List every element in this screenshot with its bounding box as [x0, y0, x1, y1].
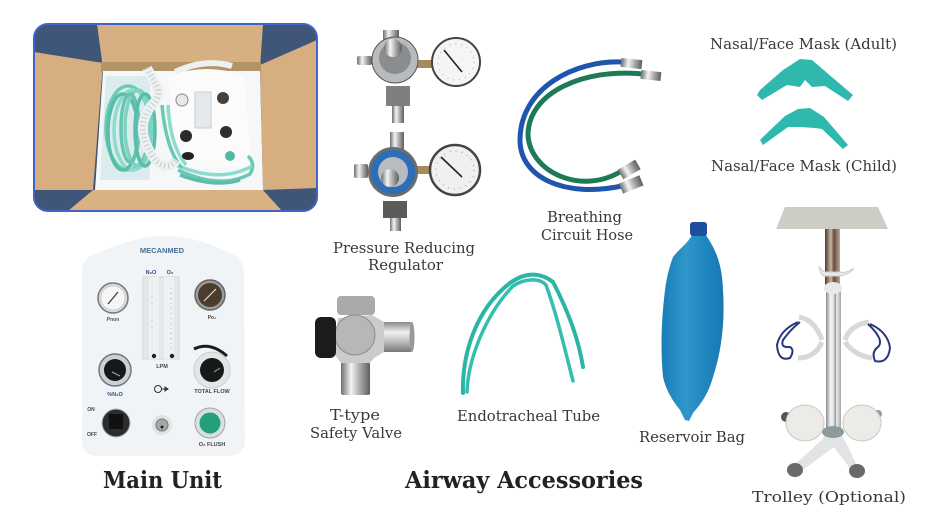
icon: child nasal mask — [760, 108, 848, 149]
gauge: pipeline pressure — [98, 283, 128, 323]
heading: main unit: Main Unit — [103, 467, 222, 494]
flowmeter labels: LPM — [156, 364, 168, 370]
heading: airway accessories: Airway Accessories — [404, 467, 643, 494]
trolley cup holder — [819, 266, 854, 276]
gauge: pipeline pressure: Pnon — [107, 317, 119, 323]
trolley top plate — [776, 207, 888, 229]
label: trolley: Trolley (Optional) — [752, 490, 906, 506]
label: pressure reducing regulator: Regulator — [368, 258, 443, 274]
trolley cylinder brackets with straps — [777, 317, 890, 361]
lower regulator — [354, 132, 480, 231]
item: T-type safety valve — [315, 296, 414, 395]
gauge: oxygen pressure — [195, 280, 225, 321]
trolley pole — [822, 229, 844, 438]
power switch: OFF — [87, 432, 97, 438]
label: T-type safety valve: Safety Valve — [310, 426, 402, 442]
label: breathing circuit hose: Breathing — [547, 210, 622, 226]
label: T-type safety valve: T-type — [330, 408, 380, 424]
knob: total flow — [194, 346, 231, 395]
item: breathing circuit hoses — [520, 58, 661, 194]
item: pressure reducing regulators — [354, 30, 480, 231]
trolley dishes — [786, 405, 881, 441]
label: T-type safety valve — [310, 408, 402, 442]
label: reservoir bag: Reservoir Bag — [639, 430, 745, 446]
label: adult mask: Nasal/Face Mask (Adult) — [710, 37, 897, 53]
gauge: oxygen pressure: Po₂ — [208, 315, 216, 321]
main unit front panel — [82, 236, 245, 456]
label: endotracheal tube: Endotracheal Tube — [457, 409, 600, 425]
label: pressure reducing regulator: Pressure Reducing — [333, 241, 475, 257]
label: child mask: Nasal/Face Mask (Child) — [711, 159, 897, 175]
common gas outlet — [152, 415, 172, 435]
flowmeter labels: O₂ — [167, 270, 174, 276]
logo: MECANMED: MECANMED — [140, 246, 185, 255]
item: reservoir bag — [662, 222, 724, 421]
oxygen flush button — [195, 408, 225, 448]
label: pressure reducing regulator — [333, 241, 475, 274]
label: breathing circuit hose — [541, 210, 633, 244]
flowmeter tubes — [143, 277, 179, 359]
knob: N2O percentage — [99, 354, 131, 398]
flowmeter labels — [146, 270, 174, 370]
photo: packed machine in cardboard box — [34, 24, 317, 211]
oxygen flush button: O₂ FLUSH — [199, 442, 225, 448]
item: endotracheal tube — [463, 275, 583, 393]
trolley base and wheels — [781, 410, 882, 478]
label: breathing circuit hose: Circuit Hose — [541, 228, 633, 244]
flowmeter labels: N₂O — [146, 270, 157, 276]
item: trolley — [776, 207, 890, 478]
icon: adult nasal mask — [757, 59, 853, 101]
knob: total flow: TOTAL FLOW — [194, 389, 231, 395]
power switch: ON — [87, 407, 95, 413]
upper regulator — [357, 30, 480, 123]
power switch — [87, 407, 130, 438]
knob: N2O percentage: %N₂O — [107, 392, 124, 398]
outlet symbol — [154, 386, 168, 392]
